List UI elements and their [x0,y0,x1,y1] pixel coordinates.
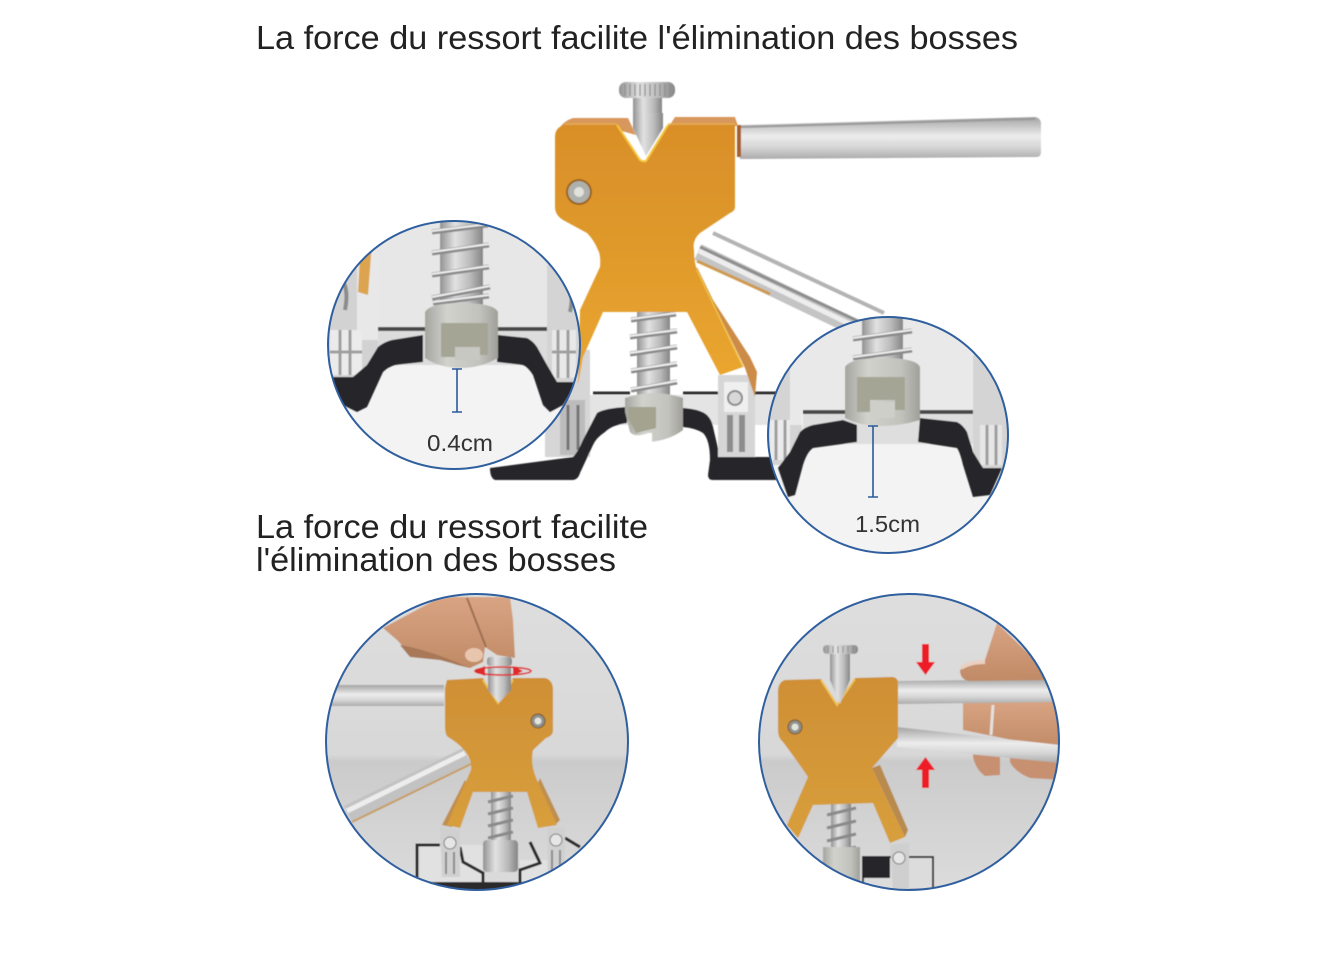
base [863,857,933,890]
rear lower handle [697,233,884,328]
main dent puller tool [490,82,1041,480]
photo circle: turning the screw [326,594,629,892]
label 1.5cm: 1.5cm [855,511,920,537]
gold body [442,778,560,827]
gold body [555,117,757,397]
subheading: La force du ressort facilite [256,508,648,545]
subheading [256,508,648,578]
rubber foot [330,335,423,412]
lower handle [344,748,471,822]
top handle [737,117,1041,159]
spring and collar [830,803,852,848]
subheading: l'élimination des bosses [256,541,616,578]
detail circle: 1.5cm clearance [766,316,1010,553]
hand behind the handles [962,702,1058,746]
title: La force du ressort facilite l'élimination des bosses [256,19,1018,56]
rotation arrow [475,667,531,675]
label 0.4cm: 0.4cm [427,430,493,456]
base plate and rubber feet [490,345,780,480]
dimension line 0.4cm [452,369,462,412]
bracket [890,852,910,889]
hand [383,597,515,668]
side brackets [329,268,378,378]
handles [898,679,1062,704]
stem and knob [488,668,511,703]
top handle [330,685,444,706]
spring [440,221,483,305]
base [529,837,580,860]
gold body [872,765,908,837]
dimension line 1.5cm [868,426,878,497]
spring and collar [491,792,511,842]
collar [425,303,498,368]
photo circle: squeezing handles [759,594,1062,892]
thumb [960,623,1052,681]
stem and knob [830,654,850,704]
press arrows [916,644,935,675]
main spring and slotted collar [625,312,683,442]
infographic canvas [258,24,1060,891]
adjusting screw [619,82,675,156]
brackets [441,844,461,877]
detail circle: 0.4cm clearance [326,221,582,469]
